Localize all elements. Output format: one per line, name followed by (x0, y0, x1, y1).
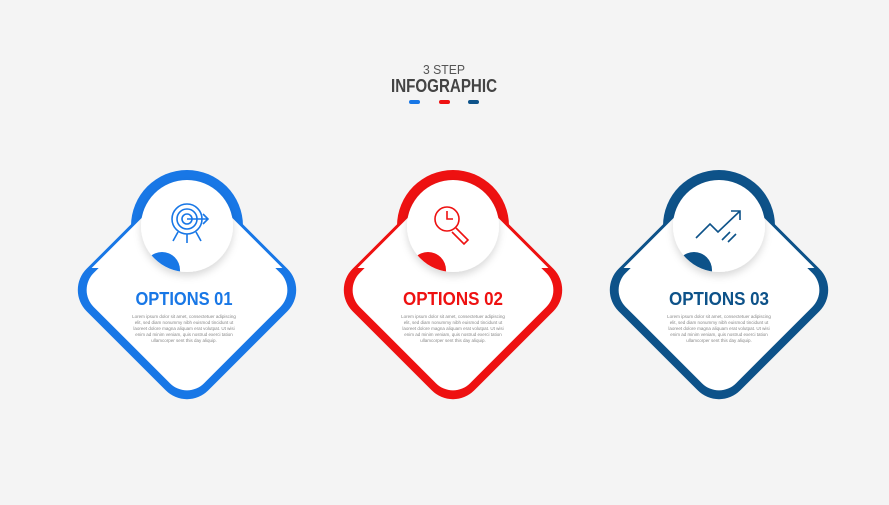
text block: elit, sed diam nonummy nibh euismod tincidunt ut (135, 320, 234, 325)
text block: Lorem ipsum dolor sit amet, consectetuer adipiscing (132, 314, 236, 319)
text block (667, 314, 771, 343)
text block: laoreet dolore magna aliquam erat volutpat. Ut wisi (402, 326, 504, 331)
text block: enim ad minim veniam, quis nostrud exerci tation (670, 332, 768, 337)
heading: OPTIONS 03 (669, 289, 769, 309)
heading: OPTIONS 02 (403, 289, 503, 309)
icon circle (673, 180, 765, 288)
title: INFOGRAPHIC (391, 76, 497, 96)
text block: ullamcorper sent this day aliquip. (686, 338, 752, 343)
text block: ullamcorper sent this day aliquip. (420, 338, 486, 343)
panel: options 01 (78, 170, 296, 400)
text block: ullamcorper sent this day aliquip. (151, 338, 217, 343)
text block (132, 314, 236, 343)
text block: laoreet dolore magna aliquam erat volutpat. Ut wisi (668, 326, 770, 331)
icon circle (141, 180, 233, 288)
text block: elit, sed diam nonummy nibh euismod tincidunt ut (404, 320, 503, 325)
text block: Lorem ipsum dolor sit amet, consectetuer adipiscing (667, 314, 771, 319)
text block: enim ad minim veniam, quis nostrud exerci tation (135, 332, 233, 337)
text block (401, 314, 505, 343)
heading: OPTIONS 01 (136, 289, 232, 309)
panel: options 03 (610, 170, 828, 400)
title (391, 62, 497, 104)
text block: enim ad minim veniam, quis nostrud exerci tation (404, 332, 502, 337)
panel: options 02 (344, 170, 562, 400)
text block: elit, sed diam nonummy nibh euismod tincidunt ut (670, 320, 769, 325)
icon circle (407, 180, 499, 288)
icon: growth arrow (696, 211, 740, 242)
text block: laoreet dolore magna aliquam erat volutpat. Ut wisi (133, 326, 235, 331)
icon: magnifier clock (435, 207, 468, 244)
icon: target (172, 204, 208, 243)
text block: Lorem ipsum dolor sit amet, consectetuer adipiscing (401, 314, 505, 319)
title: 3 STEP (423, 62, 465, 77)
